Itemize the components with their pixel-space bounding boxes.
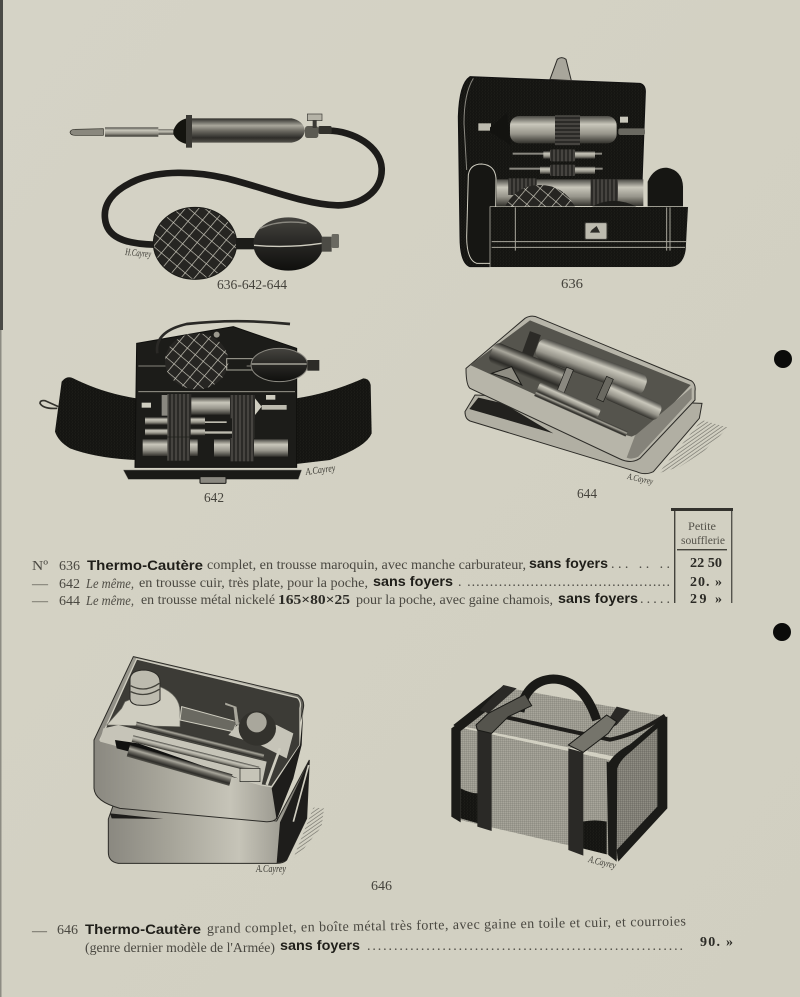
right pocket — [647, 167, 683, 207]
catalogue entries 636 642 644 — [31, 555, 670, 609]
tube row 4 — [143, 437, 288, 461]
case lower half — [465, 395, 702, 474]
hose on case — [157, 321, 290, 353]
small instruments — [509, 149, 603, 176]
hose — [105, 131, 382, 245]
tube row 1 — [142, 394, 287, 418]
large tube — [478, 113, 645, 145]
table heading — [681, 519, 725, 547]
left flap — [55, 377, 137, 460]
price table — [671, 508, 733, 607]
rubber ball with net — [153, 207, 237, 279]
entry 644: ..... — [640, 592, 670, 607]
label 642: 642 — [204, 491, 224, 506]
entry 636 — [32, 555, 670, 574]
engraver signature: A.Cayrey — [255, 864, 286, 875]
illustration: metal box 646 — [94, 657, 324, 863]
engraver signature: H.Cayrey — [124, 247, 152, 260]
right flap — [296, 378, 372, 464]
price 642: 20. » — [690, 575, 722, 590]
entry 644: en trousse métal nickelé — [141, 593, 275, 608]
handle — [520, 679, 597, 720]
punch hole — [774, 350, 792, 368]
ground shadow — [658, 420, 728, 473]
bulb — [227, 348, 319, 382]
inner tray wall — [180, 707, 237, 732]
bottle right — [225, 702, 293, 758]
tubes in case — [486, 331, 665, 437]
leather corner patches — [461, 788, 607, 854]
entry 636: Nº — [32, 559, 49, 574]
instruments in box — [100, 722, 280, 786]
illustration: cautery with hose and bulb — [70, 114, 382, 279]
illustration: canvas carrying case — [451, 679, 667, 862]
ball with net — [165, 333, 228, 389]
hanging tab — [550, 58, 571, 81]
box lower half — [108, 760, 309, 863]
price 644: 29 » — [690, 592, 722, 607]
table heading: Petite — [688, 519, 716, 533]
punch hole — [773, 623, 791, 641]
engraver signature: A.Cayrey — [587, 854, 618, 872]
catalogue entry 646 — [31, 914, 733, 956]
cautery handle — [70, 114, 332, 148]
catalogue entry 646: (genre dernier modèle de l'Armée) — [85, 941, 275, 956]
illustration: nickel metal case 644 — [465, 316, 728, 474]
catalogue entry 646: Thermo-Cautère — [85, 921, 201, 937]
label 646: 646 — [371, 879, 392, 894]
entry 636: sans foyers — [529, 555, 608, 571]
entry 636: 636 — [59, 559, 80, 574]
entry 644 — [31, 590, 670, 609]
entry 644: 165×80×25 — [278, 593, 350, 608]
lid edge highlight — [464, 78, 473, 170]
case front — [453, 727, 610, 855]
price 636: 22 50 — [690, 556, 722, 571]
inner lower half shadow — [469, 398, 553, 433]
case side — [613, 717, 667, 860]
entry 644: — — [31, 594, 49, 609]
box upper half — [94, 657, 304, 822]
catalogue entry 646: grand complet, en boîte métal très forte, avec gaine en toile et cuir, et courroies — [207, 914, 686, 937]
entry 644: sans foyers — [558, 590, 638, 606]
entry 636: Thermo-Cautère — [87, 557, 203, 573]
squeeze bulb — [236, 217, 339, 271]
label 636-642-644: 636-642-644 — [217, 278, 287, 293]
straps — [476, 685, 630, 856]
lower tube — [497, 178, 643, 206]
entry 642: — — [31, 577, 49, 592]
entry 642: Le même, — [85, 577, 134, 592]
label 644: 644 — [577, 487, 597, 502]
case front — [490, 207, 688, 267]
catalogue entry 646: ........................................................... — [367, 939, 683, 954]
bottle left — [107, 670, 180, 727]
ground shadow — [293, 808, 324, 858]
engraver signature: A.Cayrey — [626, 471, 654, 486]
case centre — [135, 327, 297, 467]
entry 636: ... .. .. — [611, 557, 670, 572]
label 636: 636 — [561, 277, 583, 292]
entry 642: sans foyers — [373, 573, 453, 589]
case base and clasp — [123, 470, 302, 483]
catalogue entry 646: 646 — [57, 923, 78, 938]
flap loop — [40, 401, 58, 408]
case top — [456, 688, 667, 757]
table heading: soufflerie — [681, 533, 725, 547]
entry 642 — [31, 573, 670, 592]
case lid — [458, 77, 645, 267]
engraver signature: A.Cayrey — [304, 463, 337, 478]
catalogue entry 646: — — [31, 924, 48, 939]
entry 636: complet, en trousse maroquin, avec manche carburateur, — [207, 558, 526, 573]
illustration: open leather case 636 — [458, 58, 688, 267]
entry 642: . ............................................. — [458, 575, 670, 590]
catalogue entry 646: 90. » — [700, 935, 733, 950]
catalogue entry 646: sans foyers — [280, 937, 360, 953]
ball in case — [505, 185, 575, 207]
entry 644: pour la poche, avec gaine chamois, — [356, 593, 553, 608]
illustration: flat leather case 642 — [40, 321, 372, 483]
entry 642: 642 — [59, 577, 80, 592]
entry 642: en trousse cuir, très plate, pour la poche, — [139, 576, 368, 591]
entry 644: 644 — [59, 594, 80, 609]
case upper half — [466, 316, 695, 462]
leather edging — [451, 686, 667, 862]
tube rows 2 and 3 — [145, 416, 255, 438]
left pocket — [467, 164, 496, 263]
entry 644: Le même, — [85, 594, 134, 609]
